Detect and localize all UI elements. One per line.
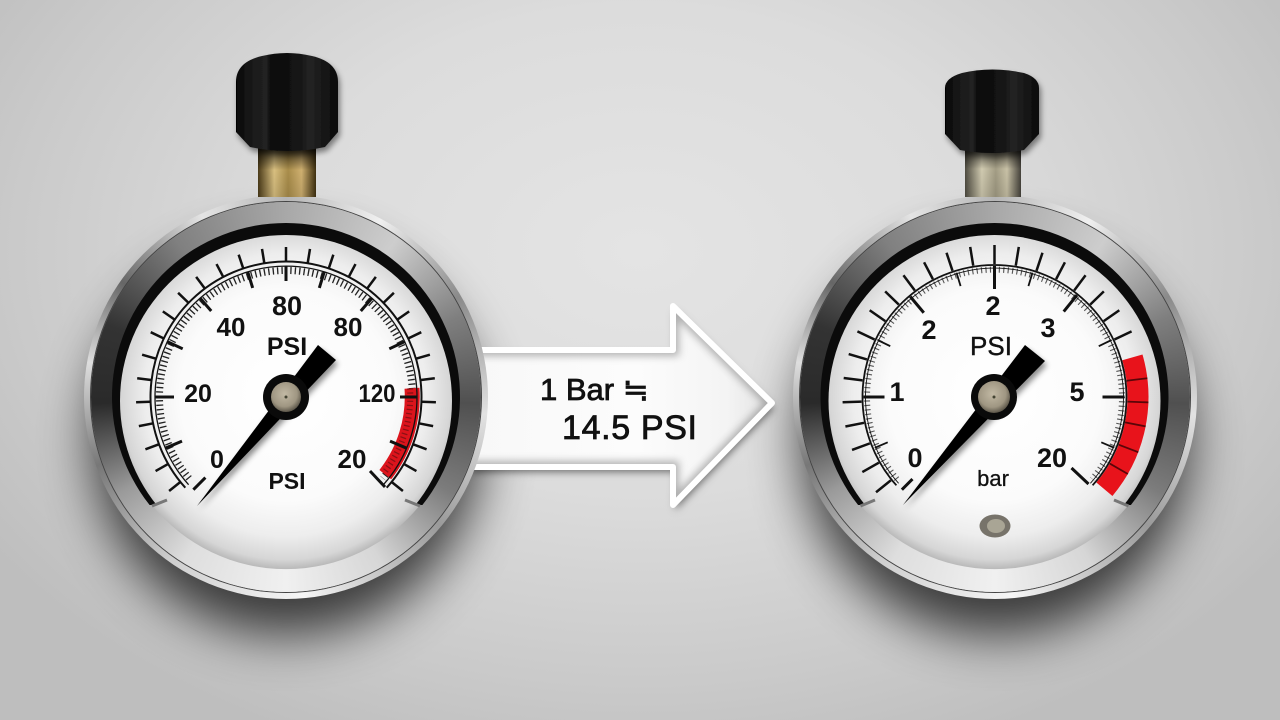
steel stem <box>965 146 1021 197</box>
pressure gauge: PSI <box>84 53 488 599</box>
needle <box>903 345 1045 505</box>
scale numbers and unit labels: 20 <box>338 444 366 474</box>
arrow label: conversion: 14.5 PSI <box>562 409 697 447</box>
brass stem <box>258 148 316 197</box>
scale numbers and unit labels: PSI <box>268 468 306 494</box>
scale numbers and unit labels <box>889 291 1085 473</box>
conversion arrow <box>472 303 777 512</box>
scale numbers and unit labels: 0 <box>907 443 923 473</box>
gauge bezel outer rim <box>792 195 1196 599</box>
dial assembly: PSI <box>970 331 1012 361</box>
scale numbers and unit labels: 2 <box>921 315 937 345</box>
scale numbers and unit labels: 3 <box>1040 313 1056 343</box>
dial assembly <box>112 223 460 569</box>
glass screw <box>980 514 1010 538</box>
pressure gauge: bar <box>793 70 1197 599</box>
scale numbers and unit labels <box>184 291 396 494</box>
black hex cap <box>236 53 338 151</box>
dial assembly <box>820 223 1168 569</box>
dial assembly: bar <box>977 466 1009 491</box>
needle <box>197 345 336 506</box>
scale numbers and unit labels: 80 <box>334 312 362 342</box>
needle hub <box>263 374 309 420</box>
arrow label: conversion: 1 Bar ≒ <box>540 372 649 407</box>
scale numbers and unit labels: 80 <box>272 291 302 321</box>
gauge bezel outer rim <box>84 195 488 599</box>
scale numbers and unit labels: 5 <box>1069 377 1085 407</box>
scale numbers and unit labels: 1 <box>889 377 905 407</box>
scale numbers and unit labels: 2 <box>985 291 1001 321</box>
scale numbers and unit labels: 0 <box>210 446 224 474</box>
scale ticks and rings <box>843 245 1148 492</box>
scale numbers and unit labels: 20 <box>1037 443 1067 473</box>
red zone <box>1104 357 1148 489</box>
shadow under bar gauge <box>800 240 1190 635</box>
scale numbers and unit labels: 40 <box>217 312 245 342</box>
black hex cap <box>945 70 1039 153</box>
scale ticks and rings <box>136 247 436 491</box>
scale numbers and unit labels: 120 <box>358 380 396 408</box>
scale numbers and unit labels: 20 <box>184 380 212 408</box>
arrow label: conversion <box>540 372 697 447</box>
scale numbers and unit labels: PSI <box>267 333 307 361</box>
needle hub <box>971 374 1017 420</box>
shadow under PSI gauge <box>92 240 482 635</box>
